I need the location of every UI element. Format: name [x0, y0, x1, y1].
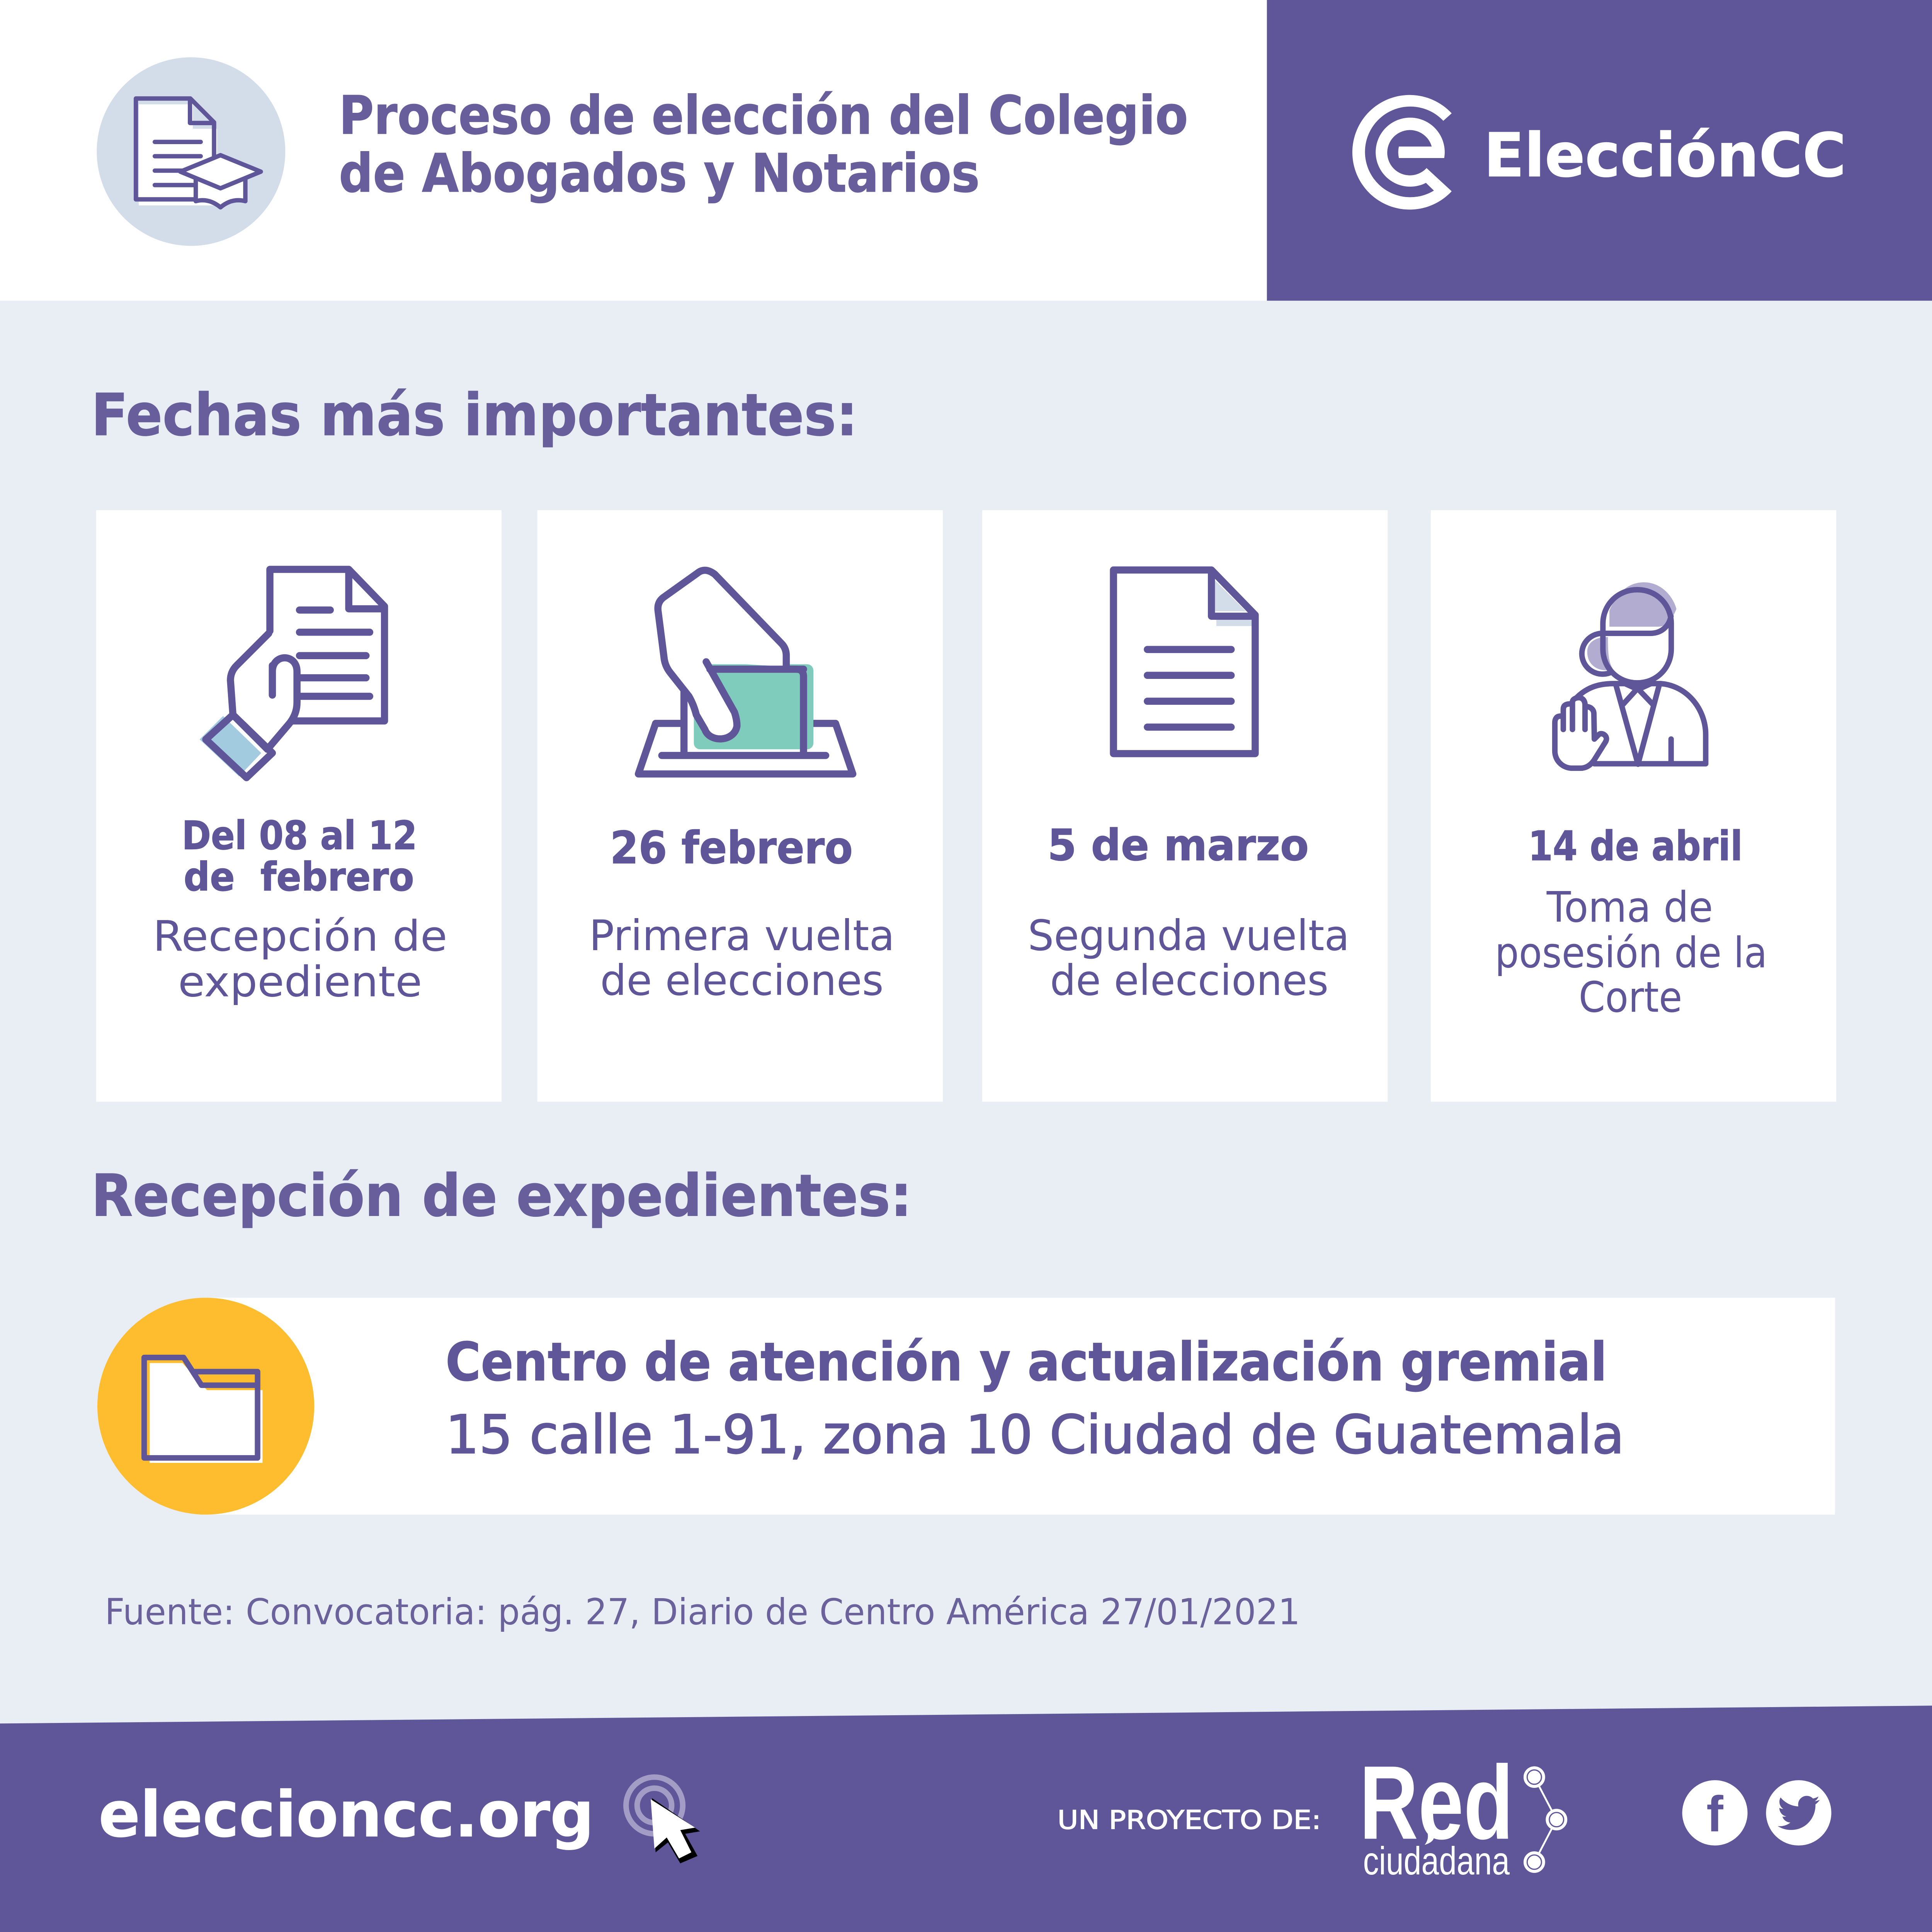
brand name: ElecciónCC	[1484, 120, 1846, 190]
date: Del 08 al 12	[182, 813, 417, 859]
description	[1028, 911, 1349, 1005]
icon: person taking oath	[1555, 582, 1706, 768]
logo: Red ciudadana: ciudadana	[1363, 1839, 1510, 1883]
icon: document	[1114, 570, 1258, 753]
logo: Red ciudadana: Red	[1359, 1745, 1514, 1861]
description: Corte	[1579, 973, 1682, 1022]
source note: Fuente: Convocatoria: pág. 27, Diario de Centro América 27/01/2021	[105, 1591, 1300, 1633]
heading: Fechas más importantes: Fechas más importantes:	[91, 382, 858, 449]
title	[339, 85, 1188, 204]
date: 14 de abril	[1528, 822, 1743, 870]
title: de Abogados y Notarios	[339, 143, 980, 204]
description: Recepción de	[153, 912, 447, 961]
panel: segunda vuelta	[982, 510, 1388, 1102]
brand panel: ElecciónCC	[1267, 0, 1932, 301]
icon: ElecciónCC logo mark	[1352, 95, 1452, 209]
footer band	[0, 1706, 1932, 1932]
date: de febrero	[184, 854, 414, 900]
icon: hand holding document	[200, 570, 384, 778]
panel: reception address	[97, 1298, 1835, 1515]
description: expediente	[178, 957, 422, 1007]
description	[1495, 883, 1767, 1022]
website: eleccioncc.org	[99, 1778, 594, 1851]
icon: twitter	[1766, 1780, 1831, 1845]
icon: document and graduation cap	[97, 57, 285, 246]
date	[182, 813, 417, 900]
panel: recepción de expediente	[96, 510, 502, 1102]
icon: hand casting ballot	[638, 570, 853, 774]
icon: click cursor	[626, 1777, 700, 1863]
address	[446, 1332, 1624, 1466]
description	[589, 911, 895, 1005]
panel: primera vuelta	[537, 510, 943, 1102]
address: Centro de atención y actualización gremial	[446, 1332, 1607, 1393]
description	[153, 912, 447, 1007]
date: 5 de marzo	[1048, 820, 1309, 871]
icon: facebook: f	[1706, 1786, 1723, 1842]
address: 15 calle 1-91, zona 10 Ciudad de Guatemala	[446, 1404, 1624, 1466]
heading: Recepción de expedientes: Recepción de expedientes:	[91, 1162, 912, 1230]
description: de elecciones	[1050, 956, 1328, 1005]
icon: folder	[97, 1298, 314, 1515]
description: Primera vuelta	[589, 911, 895, 960]
description: posesión de la	[1495, 929, 1767, 978]
icon: facebook	[1682, 1780, 1748, 1845]
panel: toma de posesión	[1431, 510, 1836, 1102]
description: de elecciones	[600, 956, 884, 1005]
description: Toma de	[1546, 883, 1713, 932]
header band	[0, 0, 1932, 301]
date: 26 febrero	[610, 822, 853, 874]
title: Proceso de elección del Colegio	[339, 85, 1188, 146]
description: Segunda vuelta	[1028, 911, 1349, 960]
project credit: UN PROYECTO DE:	[1058, 1805, 1321, 1835]
